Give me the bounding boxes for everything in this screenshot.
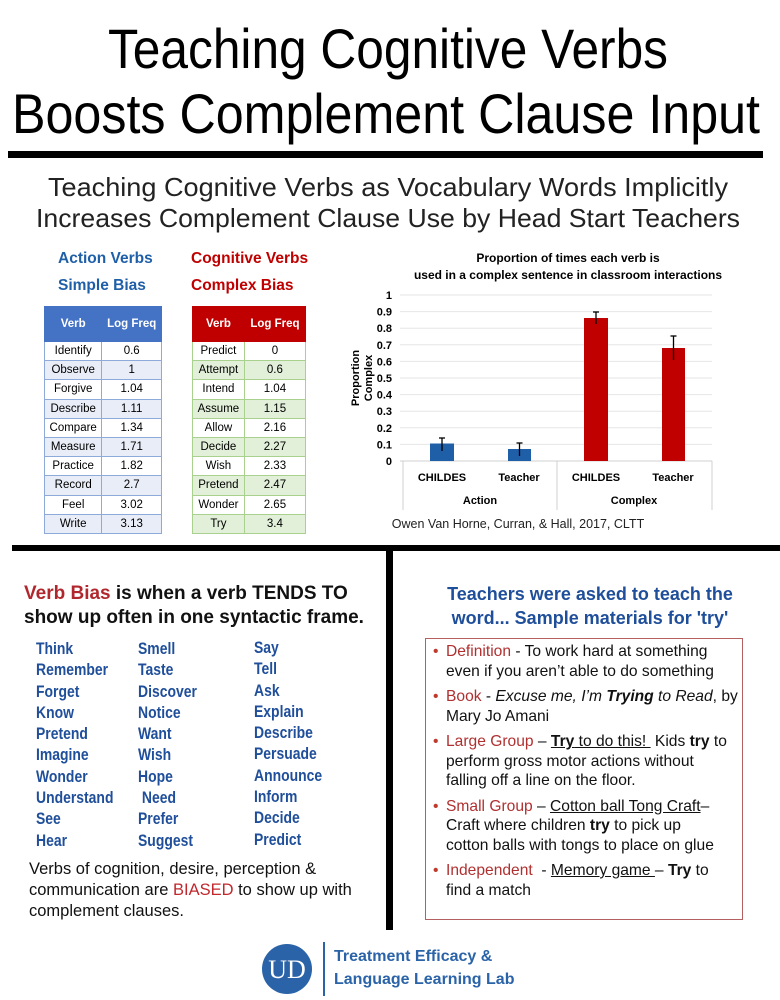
logo: Treatment Efficacy & [334,948,492,965]
table: action verbs: 1.71 [120,441,143,453]
logo: Language Learning Lab [334,971,514,988]
table: cognitive verbs: Wonder [198,499,238,511]
verb list column 2: Suggest [138,831,193,850]
table: action verbs: Verb [61,318,86,330]
verb list column 2: Discover [138,682,197,701]
verb list column 3: Announce [254,766,322,785]
bar chart: 0.2 [377,423,392,435]
heading: verb bias: Verb Bias is when a verb TENDS TO show up often in one syntactic frame. [24,583,364,628]
verb list column 1: Wonder [36,767,88,786]
logo [262,942,514,996]
heading: action verbs: Action Verbs [58,250,153,267]
table: action verbs: Describe [50,403,96,415]
bar chart: Teacher [652,472,694,484]
bar chart: Proportion [350,350,362,406]
table: action verbs: Log Freq [107,318,156,330]
verb list column 3: Decide [254,808,300,827]
table: cognitive verbs: Try [210,518,226,530]
bar chart: CHILDES [418,472,466,484]
bar chart: 0.3 [377,406,392,418]
panel: sample materials: Independent - Memory game – Try to [446,862,709,879]
table: cognitive verbs: Predict [201,345,236,357]
table: action verbs: 1.04 [120,383,143,395]
table: action verbs: Write [60,518,86,530]
verb list column 2: Notice [138,703,181,722]
bar chart: 0.4 [377,390,393,402]
icon: UD seal: UD [268,955,306,984]
heading: teachers: Teachers were asked to teach the [447,584,733,604]
verb list column 2 [138,639,197,850]
bar chart: Proportion of times each verb is [476,251,660,265]
subtitle [36,172,740,233]
panel: sample materials: find a match [446,882,531,898]
table: action verbs: Feel [62,499,84,511]
verb list column 3: Say [254,638,279,657]
table: action verbs: Forgive [54,383,92,395]
verb list column 3: Describe [254,723,313,742]
bar chart: Teacher [498,472,540,484]
subtitle: Increases Complement Clause Use by Head Start Teachers [36,203,740,233]
verb list column 3: Persuade [254,744,317,763]
verb list column 1: Remember [36,660,108,679]
bar chart: 0.1 [377,439,392,451]
table: cognitive verbs: Allow [205,422,232,434]
panel: sample materials: Definition - To work hard at something [446,643,707,660]
panel: sample materials: Mary Jo Amani [446,708,549,724]
table: cognitive verbs: 2.33 [264,460,286,472]
panel: sample materials: Book - Excuse me, I’m Trying to Read, by [446,688,738,705]
heading: teachers: word... Sample materials for 'try' [452,608,728,628]
table: action verbs: Identify [55,345,92,357]
bar chart [350,251,722,531]
text block: biased verbs: Verbs of cognition, desire, perception & communication are BIASED to show up with complement clauses. [29,860,352,920]
table: cognitive verbs: Pretend [198,479,239,491]
table: cognitive verbs: Wish [206,460,231,472]
table: action verbs: Record [55,479,92,491]
verb list column 1 [36,639,113,850]
table: cognitive verbs: 0.6 [267,364,283,376]
bar chart: 0.8 [377,323,392,335]
table: cognitive verbs: 2.27 [264,441,286,453]
table: action verbs: 1.34 [120,422,143,434]
table: cognitive verbs: 2.47 [264,479,286,491]
verb list column 1: Imagine [36,745,89,764]
table: cognitive verbs: Attempt [199,364,238,376]
panel: sample materials: even if you aren’t able to do something [446,662,714,680]
table: action verbs [44,306,162,534]
panel: sample materials: Craft where children try to pick up [446,817,681,834]
table: cognitive verbs: Assume [198,403,239,415]
verb list column 2: Smell [138,639,175,658]
bar chart: 0.9 [377,307,392,319]
table: action verbs: 1 [128,364,135,376]
verb list column 1: Pretend [36,724,88,743]
verb list column 3 [254,638,322,849]
table: action verbs: 1.11 [121,403,142,415]
table: cognitive verbs: Log Freq [250,318,300,330]
heading: cognitive verbs: Cognitive Verbs [191,250,308,267]
heading: action verbs: Simple Bias [58,277,146,294]
verb list column 2: Wish [138,745,171,764]
title [12,17,760,145]
verb list column 1: Forget [36,682,79,701]
heading: cognitive verbs [191,250,308,294]
table: action verbs: 3.02 [120,499,143,511]
verb list column 3: Explain [254,702,304,721]
verb list column 2: Taste [138,660,173,679]
verb list column 3: Tell [254,659,277,678]
table: cognitive verbs: 2.16 [264,422,286,434]
verb list column 3: Inform [254,787,297,806]
panel: sample materials: Small Group – Cotton ball Tong Craft– [446,798,709,814]
bar chart: 0.7 [377,340,392,352]
heading: action verbs [58,250,153,294]
table: cognitive verbs: 0 [272,345,278,357]
verb list column 2: Prefer [138,809,178,828]
icon: UD seal [262,944,312,994]
table: cognitive verbs: Decide [200,441,236,453]
bar chart: 0.5 [377,373,392,385]
panel: sample materials: Large Group – Try to do this! Kids try to [446,733,727,750]
subtitle: Teaching Cognitive Verbs as Vocabulary Words Implicitly [48,172,728,202]
table: cognitive verbs: 2.65 [264,499,286,511]
panel: sample materials: falling off a line on the floor. [446,772,636,789]
heading: cognitive verbs: Complex Bias [191,277,294,294]
verb list column 2: Need [142,788,176,807]
verb list column 1: Hear [36,831,67,850]
verb list column 1: Know [36,703,74,722]
bar chart: used in a complex sentence in classroom interactions [414,268,722,282]
table: cognitive verbs [192,306,306,534]
heading: teachers [447,584,733,628]
bar chart: Action [463,495,497,507]
bar chart: Complex [611,495,658,507]
table: action verbs: 0.6 [124,345,140,357]
table: action verbs: Measure [51,441,96,453]
verb list column 1: Understand [36,788,113,807]
table: cognitive verbs: Intend [202,383,234,395]
verb list column 1: See [36,809,61,828]
table: cognitive verbs: 1.15 [264,403,286,415]
bar chart: 0.6 [377,356,392,368]
panel: sample materials [425,638,743,920]
table: action verbs: Practice [52,460,94,472]
title: Teaching Cognitive Verbs [108,17,668,80]
table: action verbs: Compare [50,422,97,434]
verb list column 1: Think [36,639,73,658]
table: action verbs: 1.82 [120,460,143,472]
verb list column 2: Want [138,724,172,743]
bar chart: 1 [386,290,392,302]
bar chart: 0 [386,456,392,468]
verb list column 2: Hope [138,767,173,786]
table: action verbs: 2.7 [124,479,140,491]
table: cognitive verbs: 1.04 [264,383,286,395]
bar chart: Complex [363,354,375,401]
table: action verbs: Observe [51,364,95,376]
panel: sample materials: cotton balls with tongs to place on glue [446,836,714,854]
verb list column 3: Predict [254,830,301,849]
table: action verbs: 3.13 [120,518,143,530]
table: cognitive verbs: 3.4 [267,518,283,530]
verb list column 3: Ask [254,681,280,700]
panel: sample materials: perform gross motor actions without [446,752,694,770]
bar chart: Owen Van Horne, Curran, & Hall, 2017, CLTT [392,517,645,531]
bar chart: CHILDES [572,472,620,484]
table: cognitive verbs: Verb [206,318,231,330]
